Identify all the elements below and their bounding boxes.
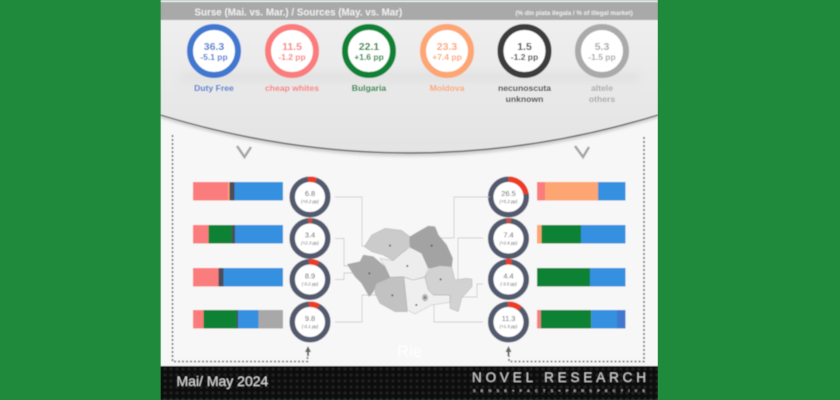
source: Duty Free [190, 27, 238, 93]
infographic panel [160, 0, 658, 400]
donut 3.4: 3.4 [305, 230, 315, 240]
donut 11.3: 11.3 [502, 314, 515, 323]
bar 4 [537, 310, 626, 328]
donut 6.8: (+0.2 pp) [301, 199, 319, 204]
left arrow [305, 346, 311, 356]
bar 1 [193, 182, 283, 200]
date: Mai/ May 2024 [176, 373, 269, 389]
source: Moldova: 23.3 [437, 41, 457, 53]
connector lines [335, 197, 490, 322]
donut 8.9: 8.9 [305, 272, 315, 280]
donut 11.3 [491, 304, 526, 340]
right chevron [575, 146, 589, 157]
source: others: altele [591, 83, 613, 93]
dome edge shadow [160, 116, 658, 154]
source: cheap whites [265, 27, 319, 93]
donut 7.4 [491, 221, 526, 256]
source: others: 5.3 [595, 41, 609, 53]
source: others: -1.5 pp [588, 52, 616, 62]
region north-west [364, 228, 410, 261]
source: Bulgaria: 22.1 [359, 41, 379, 53]
source: Duty Free: -5.1 pp [200, 52, 228, 62]
source: unknown: 1.5 [517, 41, 532, 53]
source: others [578, 27, 626, 104]
left dotted frame [172, 135, 308, 362]
donut 4.4: (-3.5 pp) [500, 282, 517, 286]
donut 3.4 [292, 221, 328, 256]
source: unknown: unknown [506, 94, 543, 104]
donut 7.4: (+2.6 pp) [500, 240, 518, 246]
region markers [368, 245, 442, 306]
Bucharest [422, 294, 428, 301]
left stacked bars [193, 182, 283, 328]
bar 2 [193, 225, 283, 244]
header band [160, 2, 658, 20]
heading: Surse (Mai. vs. Mar.) / Sources (May. vs. Mar) [194, 8, 402, 18]
brand name: NOVEL RESEARCH [472, 370, 646, 385]
source: Moldova: +7.4 pp [432, 52, 462, 62]
bar 3 [537, 268, 626, 286]
bar 4 [193, 310, 283, 328]
unit note: (% din piata ilegala / % of illegal market) [516, 10, 633, 17]
source: others: others [589, 94, 615, 104]
tagline: SENSE+FACTS+PERSPECTIVE [473, 389, 645, 393]
dome lower edge [160, 115, 658, 153]
donut 9.8 [292, 304, 328, 340]
source: unknown: -1.2 pp [511, 52, 538, 62]
faint watermark: Rie [397, 342, 422, 361]
bar 1 [537, 182, 626, 200]
region west [347, 255, 390, 297]
donut 6.8 [292, 179, 328, 215]
bar 2 [537, 225, 626, 244]
source: Moldova [423, 27, 471, 93]
right stacked bars [537, 182, 626, 328]
footer band [160, 366, 658, 400]
donut 6.8: 6.8 [305, 189, 315, 198]
region south-east [425, 266, 472, 312]
source: Duty Free: Duty Free [194, 83, 234, 93]
source: cheap whites: 11.5 [282, 41, 302, 53]
donut 8.9: (-0.2 pp) [302, 282, 319, 286]
source: Bulgaria: +1.6 pp [354, 52, 384, 62]
right arrow [506, 346, 512, 356]
region north-east [410, 226, 453, 268]
donut 26.5 [491, 179, 526, 215]
donut 9.8: 9.8 [305, 314, 315, 323]
donut 8.9 [292, 262, 328, 297]
donut 11.3: (+1.5 pp) [500, 324, 518, 329]
top header panel [160, 0, 658, 154]
source: Bulgaria [345, 27, 393, 93]
region centre [380, 247, 428, 280]
map of Romania [347, 226, 472, 314]
donut 9.8: (-0.1 pp) [302, 324, 319, 329]
region south [404, 277, 450, 314]
right donuts [491, 179, 526, 340]
region south-west [375, 277, 407, 312]
source: Moldova: Moldova [430, 83, 465, 93]
bar 3 [193, 268, 283, 286]
donut 4.4: 4.4 [503, 272, 514, 280]
source: unknown: necunoscuta [498, 83, 551, 93]
source: cheap whites: cheap whites [265, 83, 319, 93]
donut 26.5: 26.5 [501, 189, 516, 198]
left chevron [237, 146, 251, 157]
donut 7.4: 7.4 [503, 230, 514, 240]
donut 4.4 [491, 262, 526, 297]
source: unknown [498, 27, 551, 104]
source: Bulgaria: Bulgaria [352, 83, 386, 93]
dome shadow band [180, 75, 640, 79]
left donuts [292, 179, 328, 340]
source: cheap whites: -1.2 pp [278, 52, 306, 62]
grey dome background [160, 0, 658, 153]
right dotted frame [509, 137, 644, 362]
source: Duty Free: 36.3 [204, 41, 224, 53]
donut 26.5: (+5.2 pp) [500, 199, 518, 204]
donut 3.4: (+2.3 pp) [301, 240, 319, 246]
